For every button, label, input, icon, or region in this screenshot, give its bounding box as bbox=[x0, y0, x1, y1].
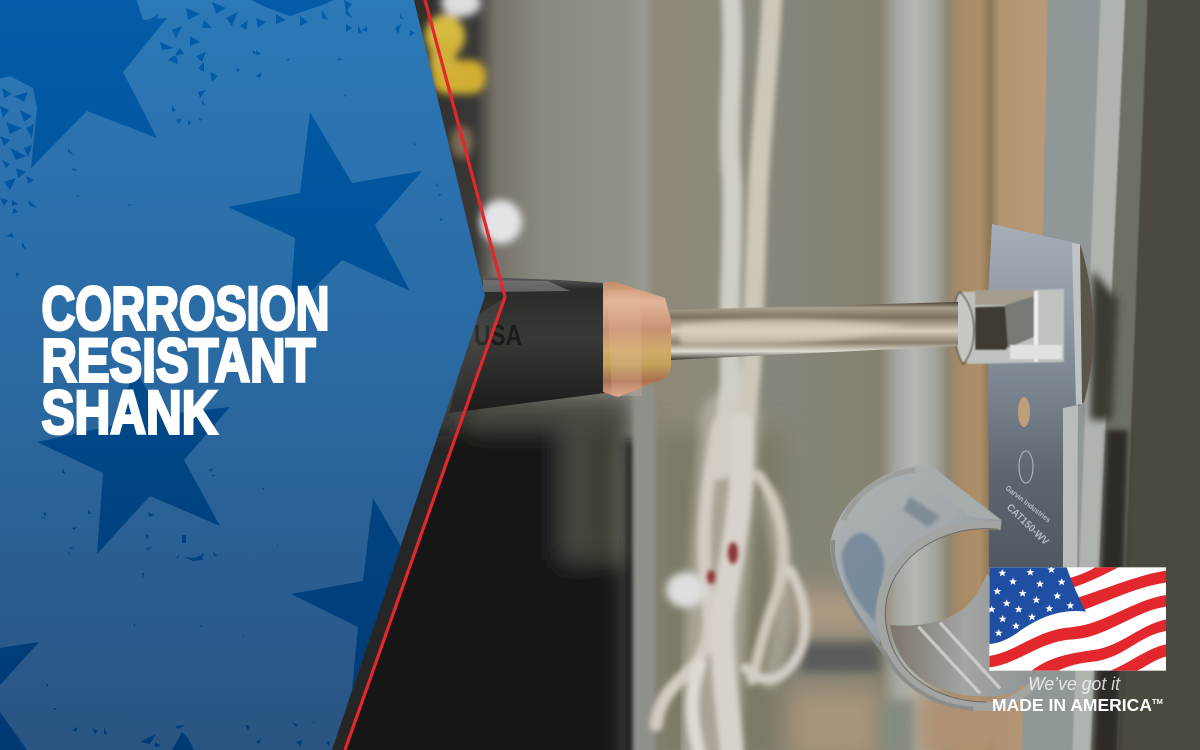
blurred lights behind the red line bbox=[425, 0, 522, 244]
tagline: Made in America: MADE IN AMERICA bbox=[992, 695, 1152, 715]
star: top edge bbox=[251, 0, 334, 16]
star: lower right bbox=[291, 498, 401, 690]
mounting plate with stamped hole bbox=[988, 224, 1118, 578]
clamp outer surface bbox=[830, 465, 1002, 643]
star: upper right bbox=[228, 112, 422, 312]
star: top left bbox=[0, 0, 167, 168]
title: SHANK bbox=[42, 378, 218, 446]
screwdriver bbox=[449, 277, 1064, 413]
distress speckle bbox=[0, 0, 443, 747]
tagline: We've got it: We’ve got it bbox=[1028, 674, 1121, 694]
title: RESISTANT bbox=[42, 326, 316, 394]
blurred white wire bundle bbox=[656, 0, 805, 750]
icon: American flag bbox=[988, 566, 1166, 671]
chrome shank bbox=[670, 302, 958, 360]
star: bottom left bbox=[0, 642, 39, 750]
copper ferrule bbox=[603, 281, 671, 397]
plate stamp text bbox=[1004, 483, 1053, 548]
metal clamp bbox=[830, 465, 1040, 709]
shaded band between panel and red line bbox=[332, 297, 505, 750]
socket tip bbox=[954, 289, 1064, 364]
star: middle bbox=[37, 368, 230, 554]
title: CORROSION bbox=[42, 274, 330, 342]
plate stamp text: CAT150-WV bbox=[1004, 502, 1051, 548]
star: bottom small bbox=[172, 732, 194, 750]
embossed USA: USA bbox=[474, 320, 522, 352]
tagline: Made in America: TM bbox=[1152, 697, 1163, 706]
metal stud bbox=[1021, 0, 1200, 750]
blue panel bbox=[0, 0, 485, 750]
red accent line bbox=[345, 0, 505, 750]
title bbox=[42, 274, 330, 446]
black handle bbox=[449, 277, 605, 413]
UL mark bbox=[1019, 451, 1033, 483]
plate stamp text: Garvin Industries bbox=[1004, 483, 1053, 524]
clamp rim bbox=[880, 525, 1040, 707]
clamp lower inner surface bbox=[890, 573, 1040, 697]
